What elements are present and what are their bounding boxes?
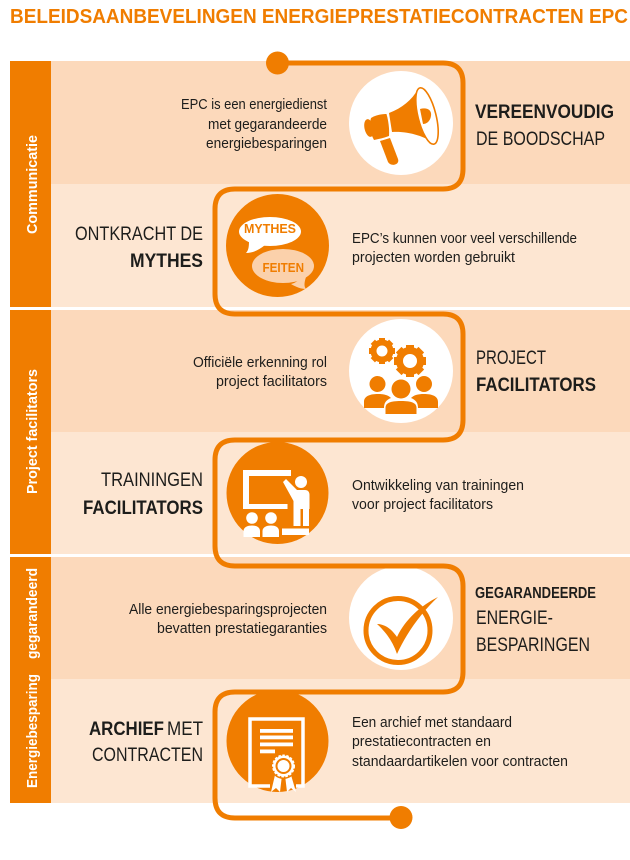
heading: gegarandeerde energiebesparingen [475,585,596,656]
speech bubble: mythes: MYTHES [244,222,296,236]
text: EPC's kunnen: EPC’s kunnen voor veel verschillende [352,230,577,247]
heading: gegarandeerde energiebesparingen: GEGARANDEERDE [475,585,596,602]
path end dot [390,806,412,829]
sidebar: project facilitators [10,310,51,554]
text: EPC is een energiedienst: met gegarandeerde [208,116,327,133]
panel: communicatie [10,61,630,307]
icon: trainer at board [226,442,328,544]
text: ontwikkeling van trainingen: voor project facilitators [352,496,493,513]
heading: ontkracht de mythes: ONTKRACHT DE [75,224,203,245]
heading: archief met contracten: CONTRACTEN [92,745,203,766]
heading: trainingen facilitators [83,470,203,519]
heading: project facilitators: PROJECT [476,348,546,369]
heading: ontkracht de mythes: MYTHES [130,251,203,272]
heading: archief met contracten: MET [167,719,203,740]
text: een archief: standaardartikelen voor contracten [352,753,568,770]
heading: vereenvoudig de boodschap: DE BOODSCHAP [476,129,605,150]
text: EPC's kunnen [352,230,577,266]
connector path [215,52,463,829]
seal and ribbon [270,753,296,792]
text: officiële erkenning [193,354,327,390]
text: alle energiebesparingsprojecten: bevatten prestatiegaranties [157,620,327,637]
presentation board [243,470,291,509]
text: ontwikkeling van trainingen: Ontwikkeling van trainingen [352,477,524,494]
text: EPC's kunnen: projecten worden gebruikt [352,249,516,266]
text: ontwikkeling van trainingen [352,477,524,513]
audience [244,512,279,537]
text: EPC is een energiedienst: EPC is een energiedienst [181,96,328,113]
small gear [364,333,400,369]
text: een archief [352,714,568,770]
heading: vereenvoudig de boodschap: VEREENVOUDIG [475,102,614,123]
text: officiële erkenning: project facilitators [216,373,327,390]
trainer [282,476,310,535]
heading: archief met contracten: ARCHIEF [89,719,164,740]
panel: energiebesparing gegarandeerd [10,557,630,803]
sidebar: communicatie [10,61,51,307]
heading: project facilitators: FACILITATORS [476,375,596,396]
sidebar: energiebesparing gegarandeerd [10,557,51,803]
heading: vereenvoudig de boodschap [475,102,614,150]
heading: trainingen facilitators: FACILITATORS [83,498,203,519]
text: alle energiebesparingsprojecten [129,601,327,637]
sidebar: project facilitators: Project facilitators [24,369,41,494]
heading: gegarandeerde energiebesparingen: BESPARINGEN [476,635,590,656]
text: officiële erkenning: Officiële erkenning rol [193,354,327,371]
people [364,376,438,414]
icon: check mark [349,566,453,670]
icon: gears and people [349,319,453,423]
text: een archief: Een archief met standaard [352,714,512,731]
speech bubble: feiten: FEITEN [262,261,304,275]
text: EPC is een energiedienst [181,96,328,152]
large gear [387,338,433,384]
heading: trainingen facilitators: TRAININGEN [101,470,203,491]
icon: mythes and feiten speech bubbles [226,194,329,297]
icon: megaphone [349,71,453,175]
panel: project facilitators [10,310,630,554]
heading: gegarandeerde energiebesparingen: ENERGIE- [476,608,553,629]
sidebar: energiebesparing gegarandeerd: gegarandeerd [24,568,41,659]
text: een archief: prestatiecontracten en [352,733,491,750]
sidebar: communicatie: Communicatie [24,135,41,234]
text: EPC is een energiedienst: energiebesparingen [206,135,327,152]
sidebar: energiebesparing gegarandeerd: Energiebesparing [24,674,41,788]
heading: ontkracht de mythes [75,224,203,272]
icon: contract certificate [226,690,328,792]
heading: archief met contracten [89,719,203,766]
path start dot [266,52,289,74]
text: alle energiebesparingsprojecten: Alle energiebesparingsprojecten [129,601,327,618]
heading: project facilitators [476,348,596,396]
